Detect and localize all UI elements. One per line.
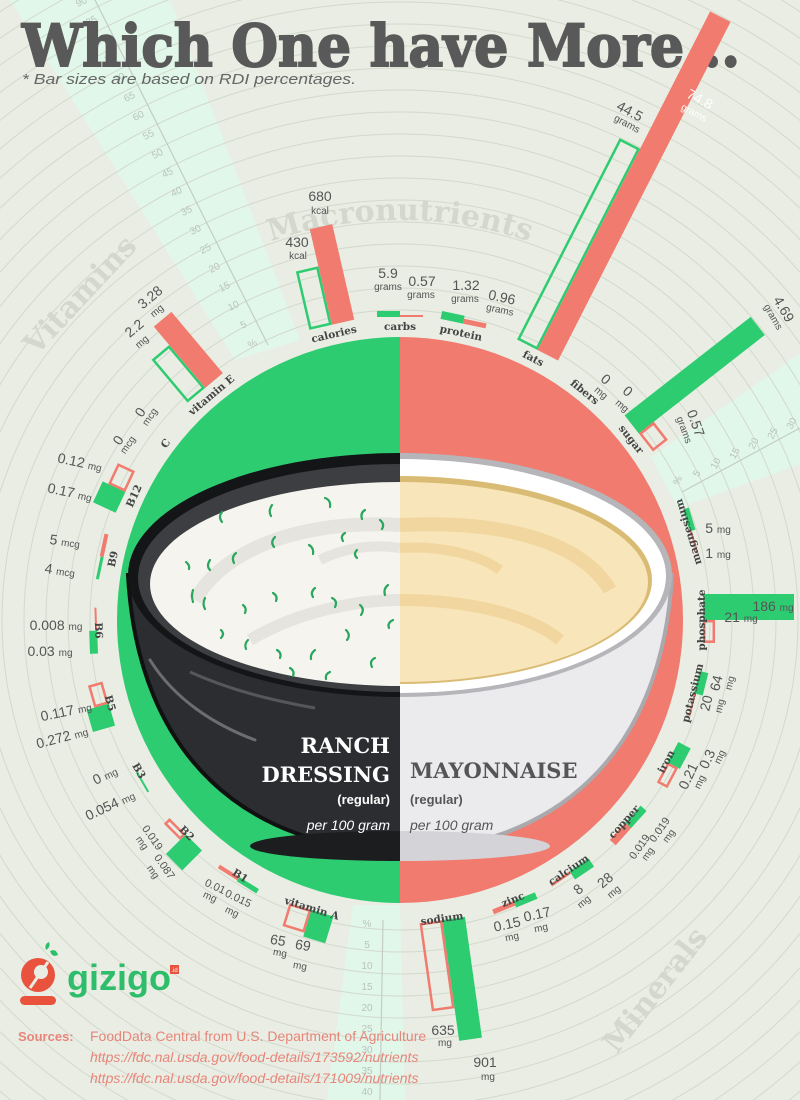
bar: calcium: calcium <box>546 852 591 888</box>
bar: B1: B1 <box>230 867 250 885</box>
values: minerals: mg <box>661 827 678 845</box>
values: minerals: 21 mg <box>724 609 758 625</box>
values: minerals: mg <box>713 749 728 766</box>
ruler: top-left scale: 60 <box>131 109 147 124</box>
values: vitamins: 0.12 mg <box>56 449 104 475</box>
values: macronutrients <box>121 86 798 445</box>
bar: fats <box>511 2 731 375</box>
values: vitamins: 0 <box>131 404 149 420</box>
values: minerals: 0.21 <box>675 760 701 792</box>
values: vitamins: 0.01 <box>203 877 227 897</box>
ruler: bottom scale: 25 <box>361 1024 373 1035</box>
ruler: bottom scale: 40 <box>361 1087 373 1098</box>
values: vitamins: 4 mcg <box>44 560 76 580</box>
values: macronutrients: grams <box>612 113 642 136</box>
bar: iron: iron <box>656 748 678 775</box>
ruler: right scale: 20 <box>747 436 762 451</box>
ruler: top-left scale <box>74 0 268 351</box>
ruler: top-left scale: 15 <box>217 280 233 295</box>
ruler: top-left scale: 5 <box>239 319 249 331</box>
values: macronutrients: grams <box>374 282 402 293</box>
bar: B12 <box>93 462 149 520</box>
values: vitamins: 0.17 mg <box>46 479 94 505</box>
values: vitamins: 0.087 <box>151 852 177 882</box>
bar: phosphate <box>696 589 794 651</box>
values: minerals: mg <box>481 1072 495 1083</box>
bar: B5: B5 <box>102 694 118 713</box>
bar: B3 <box>129 761 155 794</box>
values: vitamins: mg <box>133 834 150 852</box>
values: minerals: mg <box>605 884 623 901</box>
sources: https://fdc.nal.usda.gov/food-details/171009/nutrients <box>90 1070 418 1086</box>
ruler: bottom scale: 35 <box>361 1066 373 1077</box>
values: macronutrients: mg <box>613 398 631 415</box>
bar: B6: B6 <box>92 622 104 639</box>
bar: potassium: potassium <box>680 662 706 724</box>
values: vitamins: mg <box>223 905 240 920</box>
bar: protein: protein <box>439 323 484 344</box>
bar: protein <box>437 311 487 344</box>
bar: sugar: sugar <box>616 423 646 457</box>
ruler: bottom scale <box>361 919 383 1100</box>
values: minerals: 901 <box>473 1054 497 1070</box>
bar: copper: copper <box>606 803 643 841</box>
values: macronutrients: 74.8 <box>684 86 716 113</box>
bar: zinc: zinc <box>500 890 526 910</box>
ruler: top-left scale: 55 <box>141 128 157 143</box>
values: macronutrients: grams <box>451 294 479 305</box>
values: vitamins <box>27 404 312 973</box>
main circle <box>117 337 683 903</box>
sources: https://fdc.nal.usda.gov/food-details/173592/nutrients <box>90 1049 418 1065</box>
ruler: bottom scale: % <box>363 919 372 930</box>
bar: phosphate: phosphate <box>696 589 708 651</box>
ruler: top-left scale: 45 <box>160 166 176 181</box>
values: macronutrients: 1.32 <box>452 277 480 293</box>
ruler: top-left scale: 25 <box>198 242 214 257</box>
bar: calories <box>287 224 358 346</box>
values: macronutrients: grams <box>407 290 435 301</box>
values: minerals: 635 <box>431 1022 455 1038</box>
ruler: top-left scale: 40 <box>169 185 185 200</box>
values: macronutrients: 430 <box>285 234 309 250</box>
values: minerals <box>431 520 794 1083</box>
ruler: top-left scale: 35 <box>179 204 195 219</box>
bar: sodium <box>420 910 482 1044</box>
values: macronutrients: grams <box>485 302 515 319</box>
values: macronutrients: 3.28 <box>134 282 166 312</box>
label: ranch dressing: per 100 gram <box>306 817 390 833</box>
values: macronutrients: 2.2 <box>121 315 147 340</box>
values: vitamins: mg <box>201 890 218 905</box>
values: vitamins: 0.03 mg <box>27 643 73 659</box>
values: vitamins: 0 mg <box>90 762 120 788</box>
bowl: ranch dressing (left, dark) <box>126 453 400 861</box>
bar: vitamin A: vitamin A <box>282 895 341 923</box>
label: ranch dressing <box>262 733 390 833</box>
bar: fats: fats <box>520 349 546 369</box>
values: macronutrients: 680 <box>308 188 332 204</box>
ruler: top-left scale: % <box>246 337 259 351</box>
label: mayonnaise <box>409 758 577 833</box>
values: minerals: 0.3 <box>696 747 718 771</box>
ruler: right scale: 5 <box>691 468 704 479</box>
ruler: right scale: 10 <box>709 456 724 471</box>
values: vitamins: 0.015 <box>223 888 253 910</box>
bar: B2 <box>151 814 207 870</box>
values: macronutrients: mg <box>133 334 151 351</box>
values: vitamins: mg <box>272 947 288 960</box>
bar: B12: B12 <box>124 483 145 509</box>
values: vitamins: mg <box>292 960 308 973</box>
ruler band: bottom <box>327 905 405 1100</box>
ruler: bottom scale: 20 <box>361 1003 373 1014</box>
bar: B2: B2 <box>176 824 196 844</box>
values: macronutrients: mg <box>592 385 610 402</box>
values: macronutrients: 44.5 <box>614 98 646 125</box>
label: ranch dressing: (regular) <box>337 792 390 807</box>
bar: vitamin E <box>132 309 237 419</box>
ruler band: right <box>651 340 800 508</box>
values: macronutrients: 0 <box>598 370 614 388</box>
values: vitamins: 69 <box>294 936 312 954</box>
ruler: right scale: 30 <box>785 416 800 431</box>
values: macronutrients: grams <box>674 415 693 445</box>
sources <box>18 1028 426 1086</box>
values: macronutrients: kcal <box>311 206 329 217</box>
values: macronutrients: 0.57 <box>408 273 436 289</box>
ruler: bottom scale: 10 <box>361 961 373 972</box>
values: vitamins: mcg <box>118 434 138 456</box>
values: macronutrients: 0.57 <box>684 407 708 439</box>
bar: carbs: carbs <box>384 321 416 333</box>
sources: Sources: <box>18 1029 74 1044</box>
ruler: top-left scale: 50 <box>150 147 166 162</box>
values: minerals: mg <box>504 931 520 944</box>
values: macronutrients: 4.69 <box>770 293 798 325</box>
values: vitamins: mg <box>144 863 161 881</box>
bowl: mayonnaise (right, white) <box>400 453 674 861</box>
bar: carbs <box>377 311 423 333</box>
values: minerals: 1 mg <box>705 545 731 561</box>
values: vitamins: 0.008 mg <box>30 617 82 633</box>
bar: sugar <box>612 317 778 460</box>
values: minerals: 28 <box>594 869 616 891</box>
values: minerals: mg <box>438 1038 452 1049</box>
ruler: bottom scale: 30 <box>361 1045 373 1056</box>
logo: gizigo: .id <box>171 968 178 974</box>
label: mayonnaise: per 100 gram <box>409 817 494 833</box>
section label: Minerals: Minerals <box>596 921 715 1060</box>
bar: sodium: sodium <box>420 910 464 928</box>
values: macronutrients: 5.9 <box>378 265 398 281</box>
label: mayonnaise: (regular) <box>410 792 463 807</box>
section label: Macronutrients: Macronutrients <box>266 201 532 240</box>
ruler: right scale: 15 <box>728 446 743 461</box>
values: vitamins: 0.054 mg <box>83 787 137 823</box>
values: minerals: 20 <box>696 693 716 712</box>
values: minerals: 0.15 <box>492 913 522 935</box>
values: minerals: 5 mg <box>705 520 731 536</box>
values: macronutrients: kcal <box>289 251 307 262</box>
bar: fibers: fibers <box>568 377 601 407</box>
values: vitamins: 0.117 mg <box>39 698 93 724</box>
logo: gizigo: gizigo <box>67 957 171 998</box>
values: vitamins: 0.272 mg <box>34 722 90 752</box>
values: minerals: 0.019 <box>627 832 653 862</box>
sources: FoodData Central from U.S. Department of Agriculture <box>90 1028 426 1044</box>
values: minerals: mg <box>693 774 708 791</box>
bar: B9 <box>95 534 124 583</box>
values: vitamins: mcg <box>140 406 160 428</box>
values: minerals: mg <box>723 675 738 691</box>
values: minerals: 0.17 <box>522 903 552 925</box>
bar: calories: calories <box>310 323 358 346</box>
values: minerals: mg <box>575 894 593 911</box>
label: mayonnaise: MAYONNAISE <box>410 758 577 783</box>
bar: magnesium: magnesium <box>673 497 705 566</box>
ruler: top-left scale: 10 <box>226 299 242 314</box>
values: macronutrients: 0 <box>620 382 636 400</box>
bar: B3: B3 <box>129 761 148 781</box>
bar: C: C <box>159 437 173 451</box>
values: minerals: 64 <box>706 673 726 692</box>
title: Which One have More... <box>21 12 740 80</box>
label: ranch dressing: DRESSING <box>262 762 390 787</box>
values: minerals: mg <box>533 922 549 935</box>
values: minerals: mg <box>640 845 657 863</box>
subtitle: * Bar sizes are based on RDI percentages. <box>22 71 356 88</box>
bar: B9: B9 <box>106 550 121 568</box>
label: ranch dressing: RANCH <box>300 733 390 758</box>
section label: Vitamins: Vitamins <box>16 229 144 363</box>
values: macronutrients: grams <box>761 302 784 332</box>
values: vitamins: 5 mcg <box>49 531 81 551</box>
values: macronutrients: 0.96 <box>487 286 517 308</box>
values: vitamins: 0 <box>109 432 127 448</box>
ruler: top-left scale: 65 <box>122 90 138 105</box>
logo: gizigo <box>20 942 179 1005</box>
bar: vitamin A <box>275 895 341 945</box>
ruler: right scale: % <box>671 474 685 487</box>
values: vitamins: 65 <box>269 931 287 949</box>
bar: B6 <box>88 607 105 654</box>
bar: B1 <box>217 859 263 893</box>
values: minerals: 186 mg <box>752 598 794 614</box>
ruler: top-left scale: 20 <box>207 261 223 276</box>
bar: B5 <box>81 681 122 732</box>
values: minerals: mg <box>713 698 728 714</box>
bar: zinc <box>490 886 537 916</box>
values: minerals: 0.019 <box>647 815 673 845</box>
ruler: right scale <box>671 416 800 492</box>
bar: iron <box>651 739 691 788</box>
values: vitamins: 0.019 <box>139 823 165 853</box>
ruler: bottom scale: 15 <box>361 982 373 993</box>
ruler: top-left scale: 30 <box>188 223 204 238</box>
ruler: top-left scale: 85 <box>84 14 100 29</box>
values: macronutrients: mg <box>148 303 166 320</box>
ruler: top-left scale: 70 <box>112 71 128 86</box>
ruler band: top-left <box>10 0 300 360</box>
ruler: bottom scale: 5 <box>364 940 370 951</box>
values: minerals: 8 <box>570 880 586 898</box>
values: macronutrients: grams <box>679 102 709 125</box>
ruler: top-left scale: 80 <box>93 33 109 48</box>
bar: vitamin E: vitamin E <box>186 373 237 419</box>
ruler: right scale: 25 <box>766 426 781 441</box>
ruler: top-left scale: 75 <box>103 52 119 67</box>
